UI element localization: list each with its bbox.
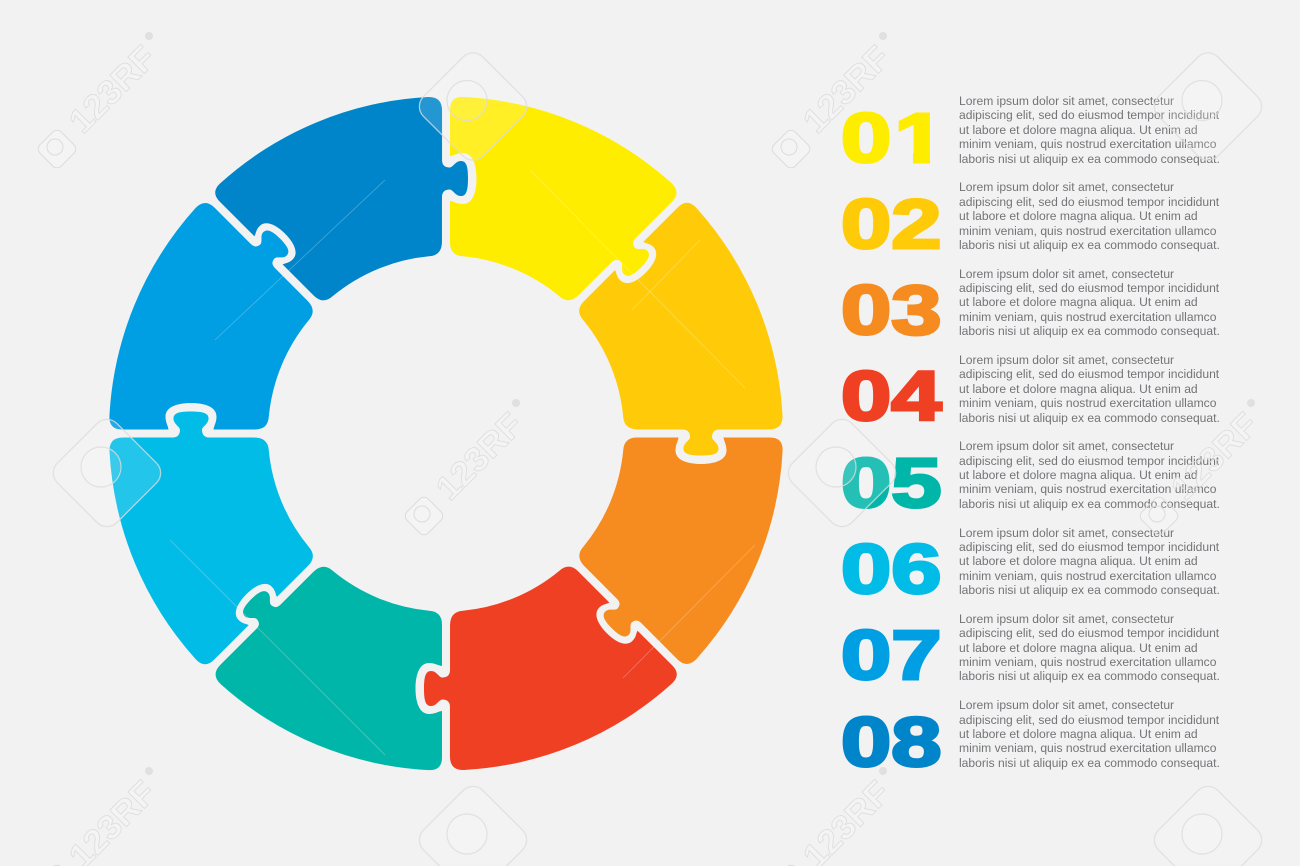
number 02: 02: [841, 185, 941, 263]
text block 08: adipiscing elit, sed do eiusmod tempor incididunt: [959, 712, 1219, 726]
text block 04: [959, 353, 1220, 425]
text block 07: Lorem ipsum dolor sit amet, consectetur: [959, 612, 1174, 626]
text block 01: ut labore et dolore magna aliqua. Ut enim ad: [959, 123, 1198, 137]
text block 01: Lorem ipsum dolor sit amet, consectetur: [959, 94, 1174, 108]
text block 04: laboris nisi ut aliquip ex ea commodo consequat.: [959, 411, 1220, 425]
number 01: 01: [841, 98, 948, 176]
list row 07: [841, 612, 1220, 694]
text block 05: [959, 439, 1220, 511]
piece 4: red: [377, 531, 681, 834]
list row 03: [841, 267, 1220, 349]
text block 08: laboris nisi ut aliquip ex ea commodo consequat.: [959, 756, 1220, 770]
text block 08: minim veniam, quis nostrud exercitation ullamco: [959, 741, 1216, 755]
text block 03: laboris nisi ut aliquip ex ea commodo consequat.: [959, 324, 1220, 338]
text block 06: laboris nisi ut aliquip ex ea commodo consequat.: [959, 583, 1220, 597]
number 06: 06: [841, 530, 941, 608]
piece 7: blue: [109, 203, 313, 430]
number 05: 05: [841, 444, 941, 522]
text block 07: minim veniam, quis nostrud exercitation ullamco: [959, 655, 1216, 669]
text block 05: adipiscing elit, sed do eiusmod tempor incididunt: [959, 454, 1219, 468]
text block 05: Lorem ipsum dolor sit amet, consectetur: [959, 439, 1174, 453]
number 03: 03: [841, 271, 941, 349]
text block 04: Lorem ipsum dolor sit amet, consectetur: [959, 353, 1174, 367]
text block 04: ut labore et dolore magna aliqua. Ut enim ad: [959, 382, 1198, 396]
text block 04: adipiscing elit, sed do eiusmod tempor incididunt: [959, 367, 1219, 381]
text block 05: minim veniam, quis nostrud exercitation ullamco: [959, 482, 1216, 496]
text block 03: Lorem ipsum dolor sit amet, consectetur: [959, 267, 1174, 281]
piece 1: yellow: [450, 97, 676, 300]
piece 6: cyan: [45, 365, 349, 669]
text block 01: minim veniam, quis nostrud exercitation ullamco: [959, 137, 1216, 151]
piece 8: dark blue: [211, 33, 515, 336]
text block 03: [959, 267, 1220, 338]
text block 03: adipiscing elit, sed do eiusmod tempor incididunt: [959, 281, 1219, 295]
text block 06: [959, 526, 1220, 597]
text block 08: Lorem ipsum dolor sit amet, consectetur: [959, 698, 1174, 712]
text block 01: laboris nisi ut aliquip ex ea commodo consequat.: [959, 152, 1220, 166]
text block 01: [959, 94, 1220, 166]
text block 02: adipiscing elit, sed do eiusmod tempor incididunt: [959, 195, 1219, 209]
text block 02: minim veniam, quis nostrud exercitation ullamco: [959, 224, 1216, 238]
text block 05: ut labore et dolore magna aliqua. Ut enim ad: [959, 468, 1198, 482]
text block 05: laboris nisi ut aliquip ex ea commodo consequat.: [959, 497, 1220, 511]
text block 06: adipiscing elit, sed do eiusmod tempor incididunt: [959, 540, 1219, 554]
text block 06: ut labore et dolore magna aliqua. Ut enim ad: [959, 554, 1198, 568]
text block 04: minim veniam, quis nostrud exercitation ullamco: [959, 396, 1216, 410]
piece 2: amber: [543, 198, 847, 502]
number 07: 07: [841, 616, 941, 694]
list row 08: [841, 698, 1220, 781]
text block 07: laboris nisi ut aliquip ex ea commodo consequat.: [959, 669, 1220, 683]
text block 02: laboris nisi ut aliquip ex ea commodo consequat.: [959, 238, 1220, 252]
text block 06: Lorem ipsum dolor sit amet, consectetur: [959, 526, 1174, 540]
text block 06: minim veniam, quis nostrud exercitation ullamco: [959, 569, 1216, 583]
text block 08: ut labore et dolore magna aliqua. Ut enim ad: [959, 727, 1198, 741]
list row 05: [841, 439, 1220, 522]
text block 03: minim veniam, quis nostrud exercitation ullamco: [959, 310, 1216, 324]
text block 07: [959, 612, 1220, 683]
text block 02: [959, 180, 1220, 252]
text block 02: ut labore et dolore magna aliqua. Ut enim ad: [959, 209, 1198, 223]
list row 04: [841, 353, 1220, 435]
number 08: 08: [841, 703, 941, 781]
number 04: 04: [841, 357, 941, 435]
text block 03: ut labore et dolore magna aliqua. Ut enim ad: [959, 295, 1198, 309]
text block 07: adipiscing elit, sed do eiusmod tempor incididunt: [959, 626, 1219, 640]
piece 5: teal: [216, 567, 442, 770]
list row 06: [841, 526, 1220, 608]
text block 02: Lorem ipsum dolor sit amet, consectetur: [959, 180, 1174, 194]
text block 01: adipiscing elit, sed do eiusmod tempor incididunt: [959, 108, 1219, 122]
text block 07: ut labore et dolore magna aliqua. Ut enim ad: [959, 641, 1198, 655]
list row 02: [841, 180, 1220, 263]
list row 01: [841, 94, 1220, 176]
text block 08: [959, 698, 1220, 770]
piece 3: orange: [579, 438, 783, 664]
